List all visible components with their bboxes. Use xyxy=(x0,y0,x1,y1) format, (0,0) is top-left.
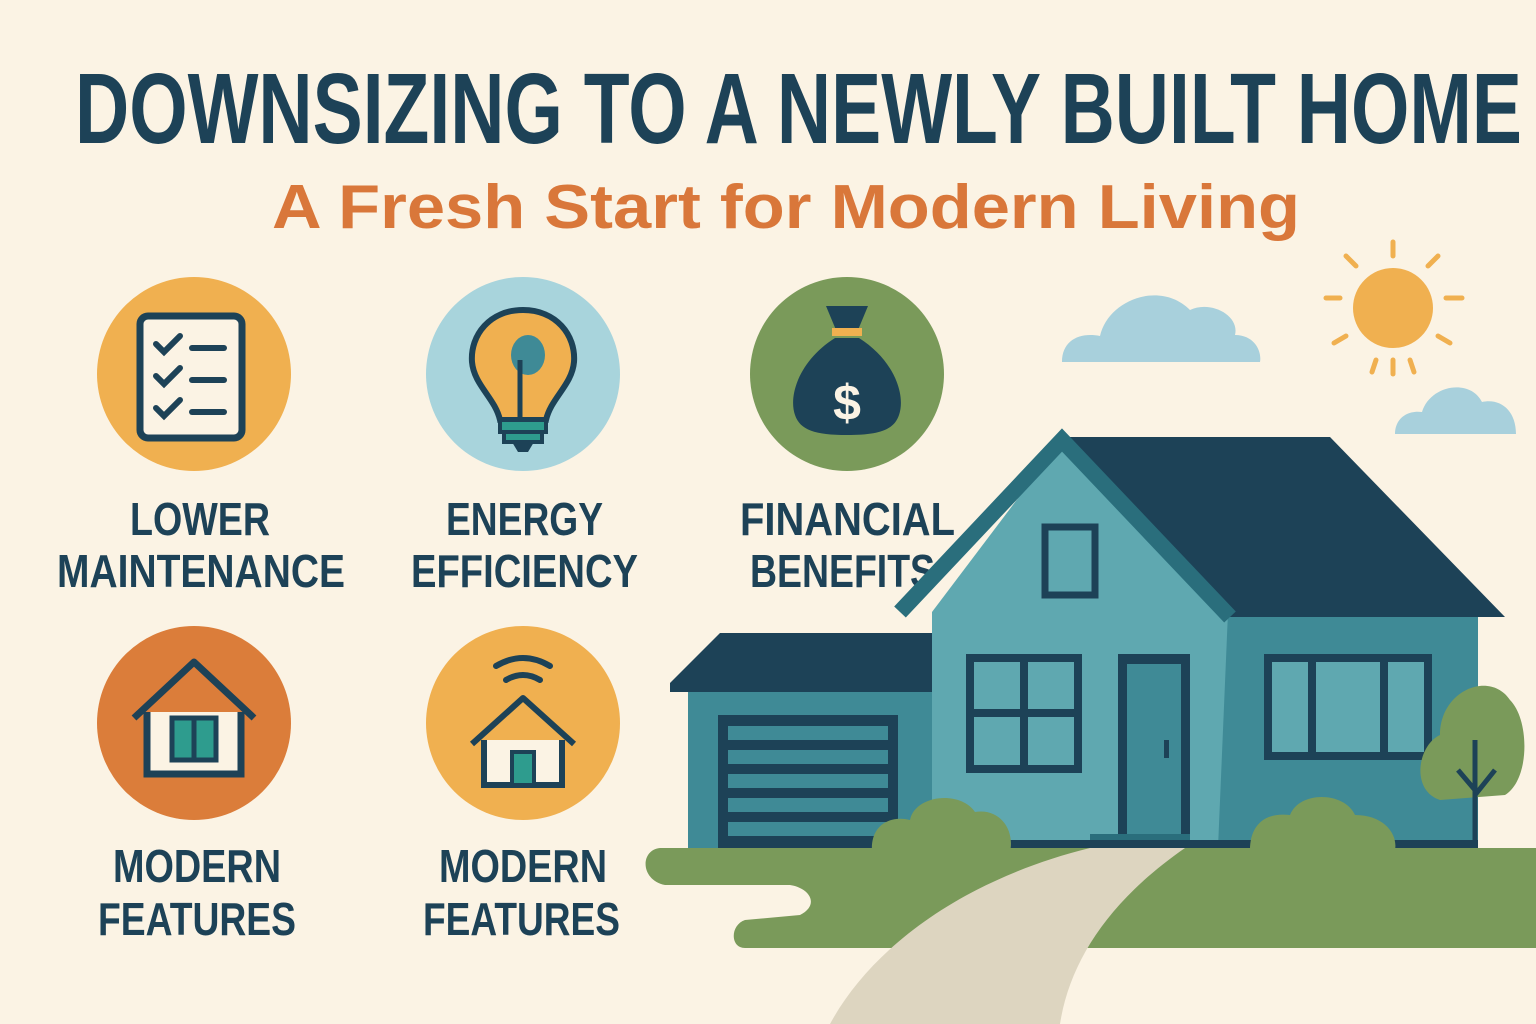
feature: modern features 1 xyxy=(97,626,296,945)
feature: lower maintenance xyxy=(57,277,345,597)
icon: light bulb xyxy=(426,277,620,471)
bushes xyxy=(872,798,1011,852)
feature: energy efficiency xyxy=(411,277,638,597)
garage xyxy=(670,633,938,848)
label: FINANCIAL xyxy=(740,493,955,545)
ground xyxy=(646,848,1536,948)
label xyxy=(57,493,345,597)
label: MAINTENANCE xyxy=(57,545,345,597)
label xyxy=(98,840,296,945)
icon: house xyxy=(97,626,291,820)
label: MODERN xyxy=(439,840,607,892)
icon: cloud small xyxy=(1395,387,1516,434)
subtitle: A Fresh Start for Modern Living xyxy=(272,173,1300,242)
label: ENERGY xyxy=(446,493,603,545)
label: MODERN xyxy=(113,840,281,892)
label: EFFICIENCY xyxy=(411,545,638,597)
label: FEATURES xyxy=(423,893,620,945)
label: BENEFITS xyxy=(750,545,935,597)
icon: checklist xyxy=(97,277,291,471)
icon: money bag: $ xyxy=(833,375,861,431)
icon: sun xyxy=(1326,242,1462,374)
illustration: house xyxy=(646,437,1536,1024)
icon: smart home xyxy=(426,626,620,820)
feature: financial benefits xyxy=(740,277,955,597)
label xyxy=(740,493,955,597)
feature: modern features 2 xyxy=(423,626,620,945)
label xyxy=(411,493,638,597)
main gable xyxy=(900,440,1230,848)
label: LOWER xyxy=(130,493,270,545)
label: FEATURES xyxy=(98,893,296,945)
tree xyxy=(1420,686,1524,840)
label xyxy=(423,840,620,945)
right wing xyxy=(1062,437,1505,848)
icon: money bag xyxy=(750,277,944,471)
path xyxy=(830,848,1185,1024)
icon: cloud large xyxy=(1062,295,1260,362)
